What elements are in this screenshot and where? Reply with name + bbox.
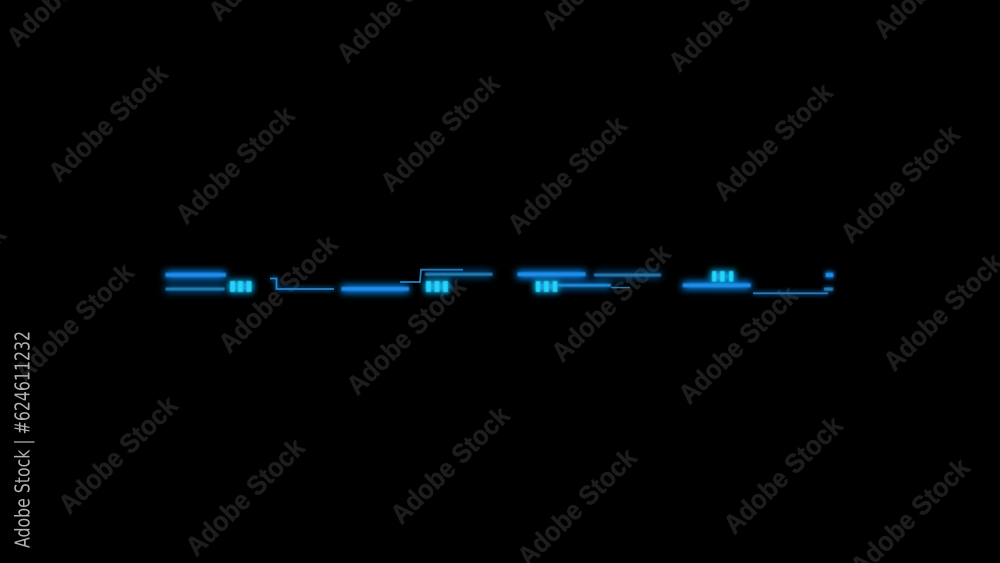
watermark pattern: Adobe Stock [53,390,184,520]
icon: triple ticks 3 [536,281,557,292]
watermark pattern: Adobe Stock [43,58,174,188]
watermark pattern: Adobe Stock [835,119,966,249]
circuit line left [270,278,334,289]
icon: triple ticks 2 [426,281,448,292]
watermark pattern: Adobe Stock [673,280,804,410]
watermark pattern: Adobe Stock [546,238,677,368]
watermark pattern: Adobe Stock [180,432,311,562]
watermark pattern: Adobe Stock [385,400,516,530]
neon segment group 2 [341,270,492,292]
watermark pattern: Adobe Stock [213,229,344,359]
circuit line upper [400,270,463,282]
icon: triple ticks 1 [230,281,252,292]
icon: triple ticks 4 [712,271,733,282]
watermark pattern: Adobe Stock [375,68,506,198]
neon segment group 4 [682,271,834,296]
watermark pattern: Adobe Stock [9,257,140,387]
watermark pattern: Adobe Stock [718,410,849,540]
vertical stock id label: Adobe Stock | #624611232 [10,331,34,548]
watermark pattern: Adobe Stock [341,271,472,401]
neon segment group 3 [517,271,661,292]
watermark pattern: Adobe Stock [170,100,301,230]
neon segment group 1 [165,272,252,292]
watermark pattern: Adobe Stock [502,110,633,240]
watermark pattern: Adobe Stock [708,77,839,207]
